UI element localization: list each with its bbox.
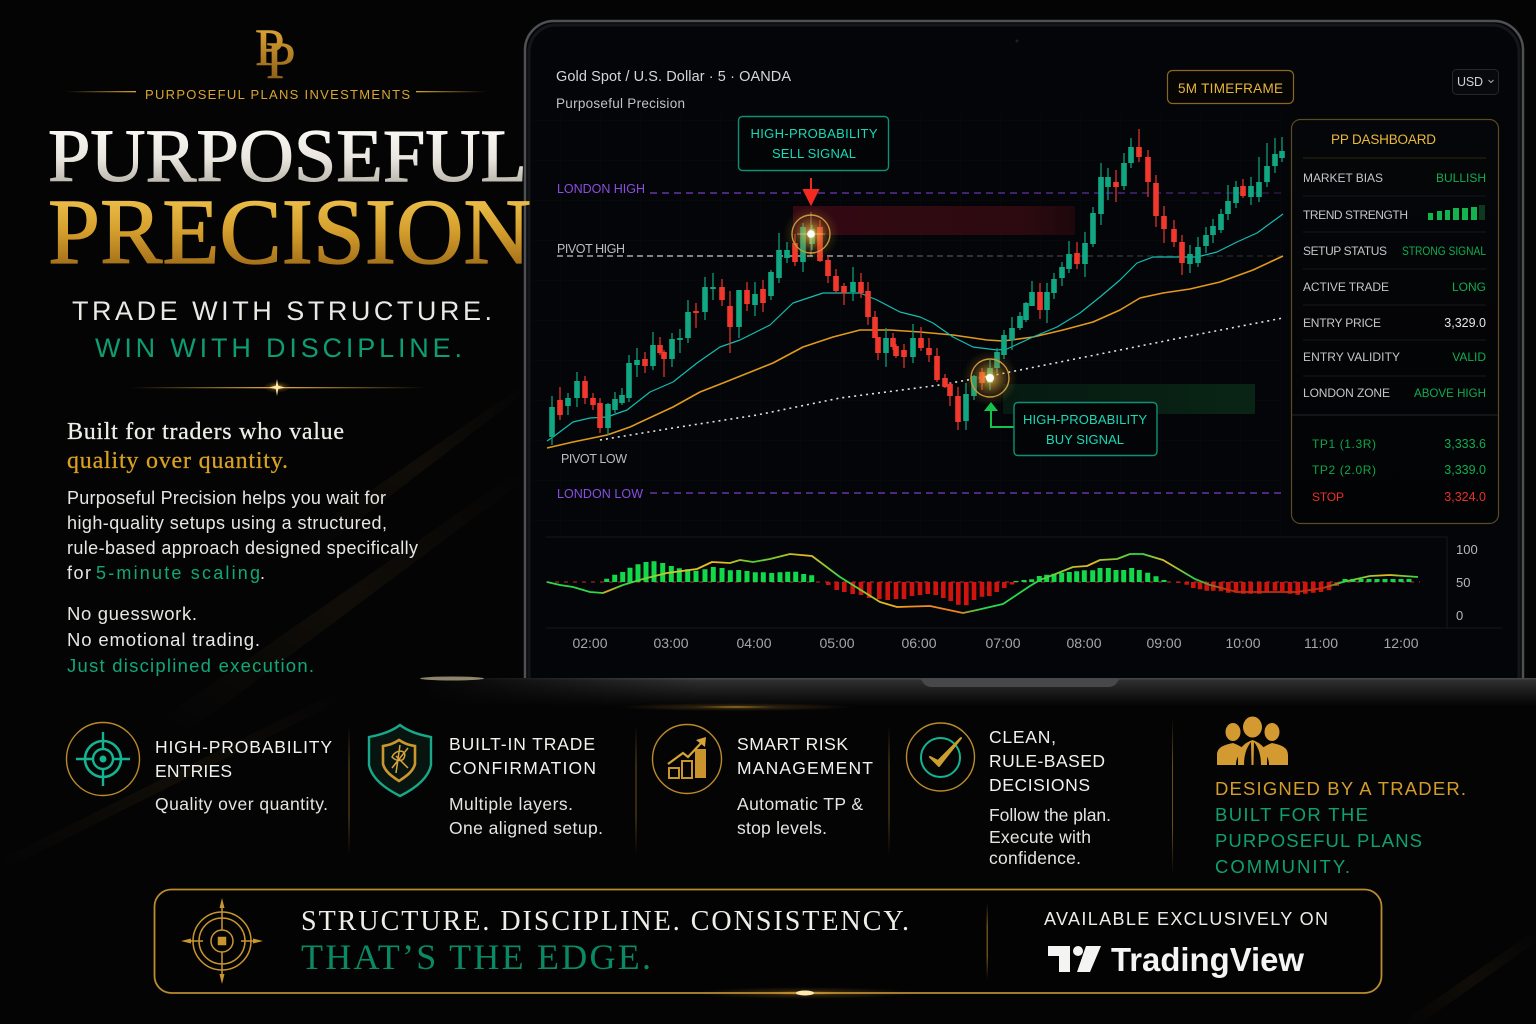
- brand name: PURPOSEFUL PLANS INVESTMENTS: [145, 87, 410, 102]
- feature heading: ENTRIES: [155, 761, 232, 781]
- red wicks: [560, 129, 1243, 433]
- row: active trade: [1303, 280, 1486, 294]
- row: entry price: [1303, 316, 1486, 330]
- banner headline: STRUCTURE. DISCIPLINE. CONSISTENCY.: [301, 906, 909, 937]
- feature: high-probability entries: [66, 722, 332, 814]
- title line 1: PURPOSEFUL: [48, 115, 527, 198]
- feature: built-in trade confirmation: [369, 725, 603, 838]
- row: TP2: 3,339.0: [1444, 463, 1486, 477]
- row: market bias: [1303, 171, 1486, 185]
- oscillator red bars: [828, 582, 1337, 605]
- dotted long ma: [600, 318, 1283, 440]
- sell callout: HIGH-PROBABILITY: [750, 126, 878, 141]
- bottom banner: [154, 890, 1382, 999]
- oscillator axis labels: 0: [1456, 608, 1463, 623]
- buy callout: HIGH-PROBABILITY: [1023, 412, 1147, 427]
- buy zone: [1003, 384, 1255, 414]
- feature text: Multiple layers.: [449, 794, 573, 814]
- time axis: 07:00: [985, 635, 1021, 651]
- feature heading: CLEAN,: [989, 727, 1056, 747]
- feature heading: [155, 737, 332, 781]
- row: TP1: 3,333.6: [1444, 437, 1486, 451]
- sell callout: [738, 116, 888, 170]
- indicator name: Purposeful Precision: [556, 96, 685, 111]
- level: pivot high: PIVOT HIGH: [557, 242, 625, 256]
- row: stop: [1312, 490, 1486, 504]
- feature: clean rule-based decisions: [906, 723, 1111, 868]
- description paragraph: Purposeful Precision helps you wait for: [67, 488, 386, 508]
- row: stop: 3,324.0: [1444, 490, 1486, 504]
- row: london zone: LONDON ZONE: [1303, 386, 1390, 400]
- candlesticks: [552, 129, 1282, 445]
- currency selector: USD: [1457, 75, 1483, 89]
- feature heading: MANAGEMENT: [737, 758, 873, 778]
- feature: smart risk management: [652, 724, 873, 838]
- logo monogram: [255, 19, 295, 90]
- community callout: [1215, 716, 1466, 877]
- green wicks: [552, 137, 1282, 445]
- row: TP2: [1312, 463, 1486, 477]
- sell signal marker: [783, 206, 839, 262]
- laptop base: [420, 676, 1536, 711]
- oscillator axis labels: 50: [1456, 575, 1470, 590]
- TradingView logo: TradingView: [1111, 941, 1304, 978]
- feature heading: [737, 734, 873, 778]
- community text: DESIGNED BY A TRADER.: [1215, 778, 1466, 799]
- tagline white: TRADE WITH STRUCTURE.: [72, 296, 492, 326]
- time axis: 06:00: [901, 635, 937, 651]
- time axis: 10:00: [1225, 635, 1261, 651]
- community text: BUILT FOR THE: [1215, 804, 1368, 825]
- sell arrow: [804, 178, 818, 204]
- time axis: 12:00: [1383, 635, 1419, 651]
- time axis: 05:00: [819, 635, 855, 651]
- row: entry price: 3,329.0: [1444, 316, 1486, 330]
- row: entry validity: [1303, 350, 1486, 364]
- red bodies: [560, 147, 1243, 428]
- icon: teal target: [66, 722, 140, 796]
- intro heading: Built for traders who value: [67, 419, 344, 445]
- row: active trade: ACTIVE TRADE: [1303, 280, 1389, 294]
- time axis: 03:00: [653, 635, 689, 651]
- closing statements: No emotional trading.: [67, 629, 260, 650]
- row: TP2: TP2 (2.0R): [1312, 463, 1376, 477]
- timeframe badge: 5M TIMEFRAME: [1178, 81, 1283, 96]
- sell callout: SELL SIGNAL: [772, 146, 856, 161]
- logo monogram: P: [266, 32, 295, 90]
- availability text: AVAILABLE EXCLUSIVELY ON: [1044, 909, 1328, 929]
- star divider: [130, 379, 425, 396]
- chart title: Gold Spot / U.S. Dollar · 5 · OANDA: [556, 69, 791, 85]
- level: pivot low: PIVOT LOW: [561, 452, 627, 466]
- oscillator zero line: [546, 581, 1420, 583]
- row: stop: STOP: [1312, 490, 1344, 504]
- logo monogram: P: [255, 19, 284, 77]
- tagline: [72, 296, 492, 363]
- icon: chart arrow: [652, 724, 722, 794]
- feature text: Automatic TP &: [737, 794, 863, 814]
- logo rule left: [66, 91, 136, 92]
- description paragraph: for: [67, 563, 91, 583]
- buy callout: [1014, 402, 1157, 456]
- currency selector: [1452, 70, 1498, 94]
- title line 2: PRECISION: [48, 181, 531, 284]
- oscillator panel: [546, 537, 1502, 651]
- feature text: Quality over quantity.: [155, 794, 328, 814]
- row: TP1: [1312, 437, 1486, 451]
- row: entry price: ENTRY PRICE: [1303, 316, 1381, 330]
- row: entry validity: ENTRY VALIDITY: [1303, 350, 1400, 364]
- description paragraph: 5-minute scaling: [96, 563, 260, 583]
- row: trend strength: TREND STRENGTH: [1303, 208, 1408, 222]
- feature heading: SMART RISK: [737, 734, 848, 754]
- closing statements: [67, 603, 314, 676]
- level: london low: LONDON LOW: [557, 487, 643, 501]
- community text: PURPOSEFUL PLANS: [1215, 830, 1422, 851]
- row: london zone: ABOVE HIGH: [1414, 386, 1486, 400]
- feature heading: HIGH-PROBABILITY: [155, 737, 332, 757]
- description paragraph: .: [260, 563, 265, 583]
- closing statements: No guesswork.: [67, 603, 197, 624]
- feature text: [989, 805, 1111, 868]
- closing statements: Just disciplined execution.: [67, 655, 314, 676]
- banner subline: THAT’S THE EDGE.: [301, 937, 651, 977]
- row: setup status: [1303, 244, 1486, 258]
- row: trend strength: [1303, 205, 1485, 222]
- intro heading: [67, 419, 344, 474]
- row: london zone: [1303, 386, 1486, 400]
- icon: shield: [369, 725, 431, 796]
- icon: gold target: [181, 898, 263, 984]
- buy signal marker: [962, 350, 1018, 406]
- PP dashboard: [1292, 120, 1498, 524]
- buy arrow: [984, 402, 1014, 427]
- row: entry validity: VALID: [1452, 350, 1486, 364]
- time axis: 04:00: [736, 635, 772, 651]
- sell zone: [793, 206, 1075, 235]
- feature heading: DECISIONS: [989, 775, 1090, 795]
- intro heading: quality over quantity.: [67, 448, 288, 474]
- time axis: 11:00: [1304, 635, 1338, 651]
- feature text: confidence.: [989, 848, 1081, 868]
- teal ma: [547, 214, 1283, 441]
- time axis: 02:00: [572, 635, 608, 651]
- row: market bias: MARKET BIAS: [1303, 171, 1383, 185]
- main title: [48, 115, 531, 284]
- community text: [1215, 778, 1466, 877]
- description paragraph: rule-based approach designed specifically: [67, 538, 418, 558]
- oscillator green bars: [607, 561, 1409, 582]
- timeframe badge: [1168, 70, 1294, 104]
- chart panel: [532, 69, 1498, 536]
- time axis: 08:00: [1066, 635, 1102, 651]
- feature heading: CONFIRMATION: [449, 758, 596, 778]
- row: TP1: TP1 (1.3R): [1312, 437, 1376, 451]
- feature text: [449, 794, 603, 838]
- row: setup status: STRONG SIGNAL: [1402, 244, 1486, 258]
- icon: people: [1217, 716, 1288, 765]
- feature heading: [989, 727, 1105, 795]
- time axis: 09:00: [1146, 635, 1182, 651]
- feature text: Execute with: [989, 827, 1091, 847]
- row: market bias: BULLISH: [1436, 171, 1486, 185]
- laptop frame and screen: [525, 21, 1523, 678]
- oscillator axis labels: [1456, 542, 1478, 623]
- description paragraph: high-quality setups using a structured,: [67, 513, 387, 533]
- feature heading: [449, 734, 596, 778]
- feature text: Follow the plan.: [989, 805, 1111, 825]
- orange ma: [547, 256, 1283, 448]
- moving average lines: [547, 214, 1283, 448]
- oscillator axis labels: 100: [1456, 542, 1478, 557]
- brand logo: [66, 19, 486, 102]
- description paragraph: [67, 488, 418, 583]
- feature text: stop levels.: [737, 818, 827, 838]
- icon: check circle: [906, 723, 974, 791]
- dashboard heading: PP DASHBOARD: [1331, 132, 1436, 147]
- community text: COMMUNITY.: [1215, 856, 1350, 877]
- logo rule right: [416, 91, 486, 92]
- green bodies: [552, 147, 1282, 437]
- feature heading: RULE-BASED: [989, 751, 1105, 771]
- tagline green: WIN WITH DISCIPLINE.: [95, 333, 462, 363]
- time axis: [572, 635, 1419, 651]
- level: london high: LONDON HIGH: [557, 182, 645, 196]
- feature text: [737, 794, 863, 838]
- row: setup status: SETUP STATUS: [1303, 244, 1387, 258]
- feature heading: BUILT-IN TRADE: [449, 734, 595, 754]
- row: active trade: LONG: [1452, 280, 1486, 294]
- feature text: One aligned setup.: [449, 818, 603, 838]
- buy callout: BUY SIGNAL: [1046, 432, 1124, 447]
- oscillator signal line: [547, 554, 1418, 613]
